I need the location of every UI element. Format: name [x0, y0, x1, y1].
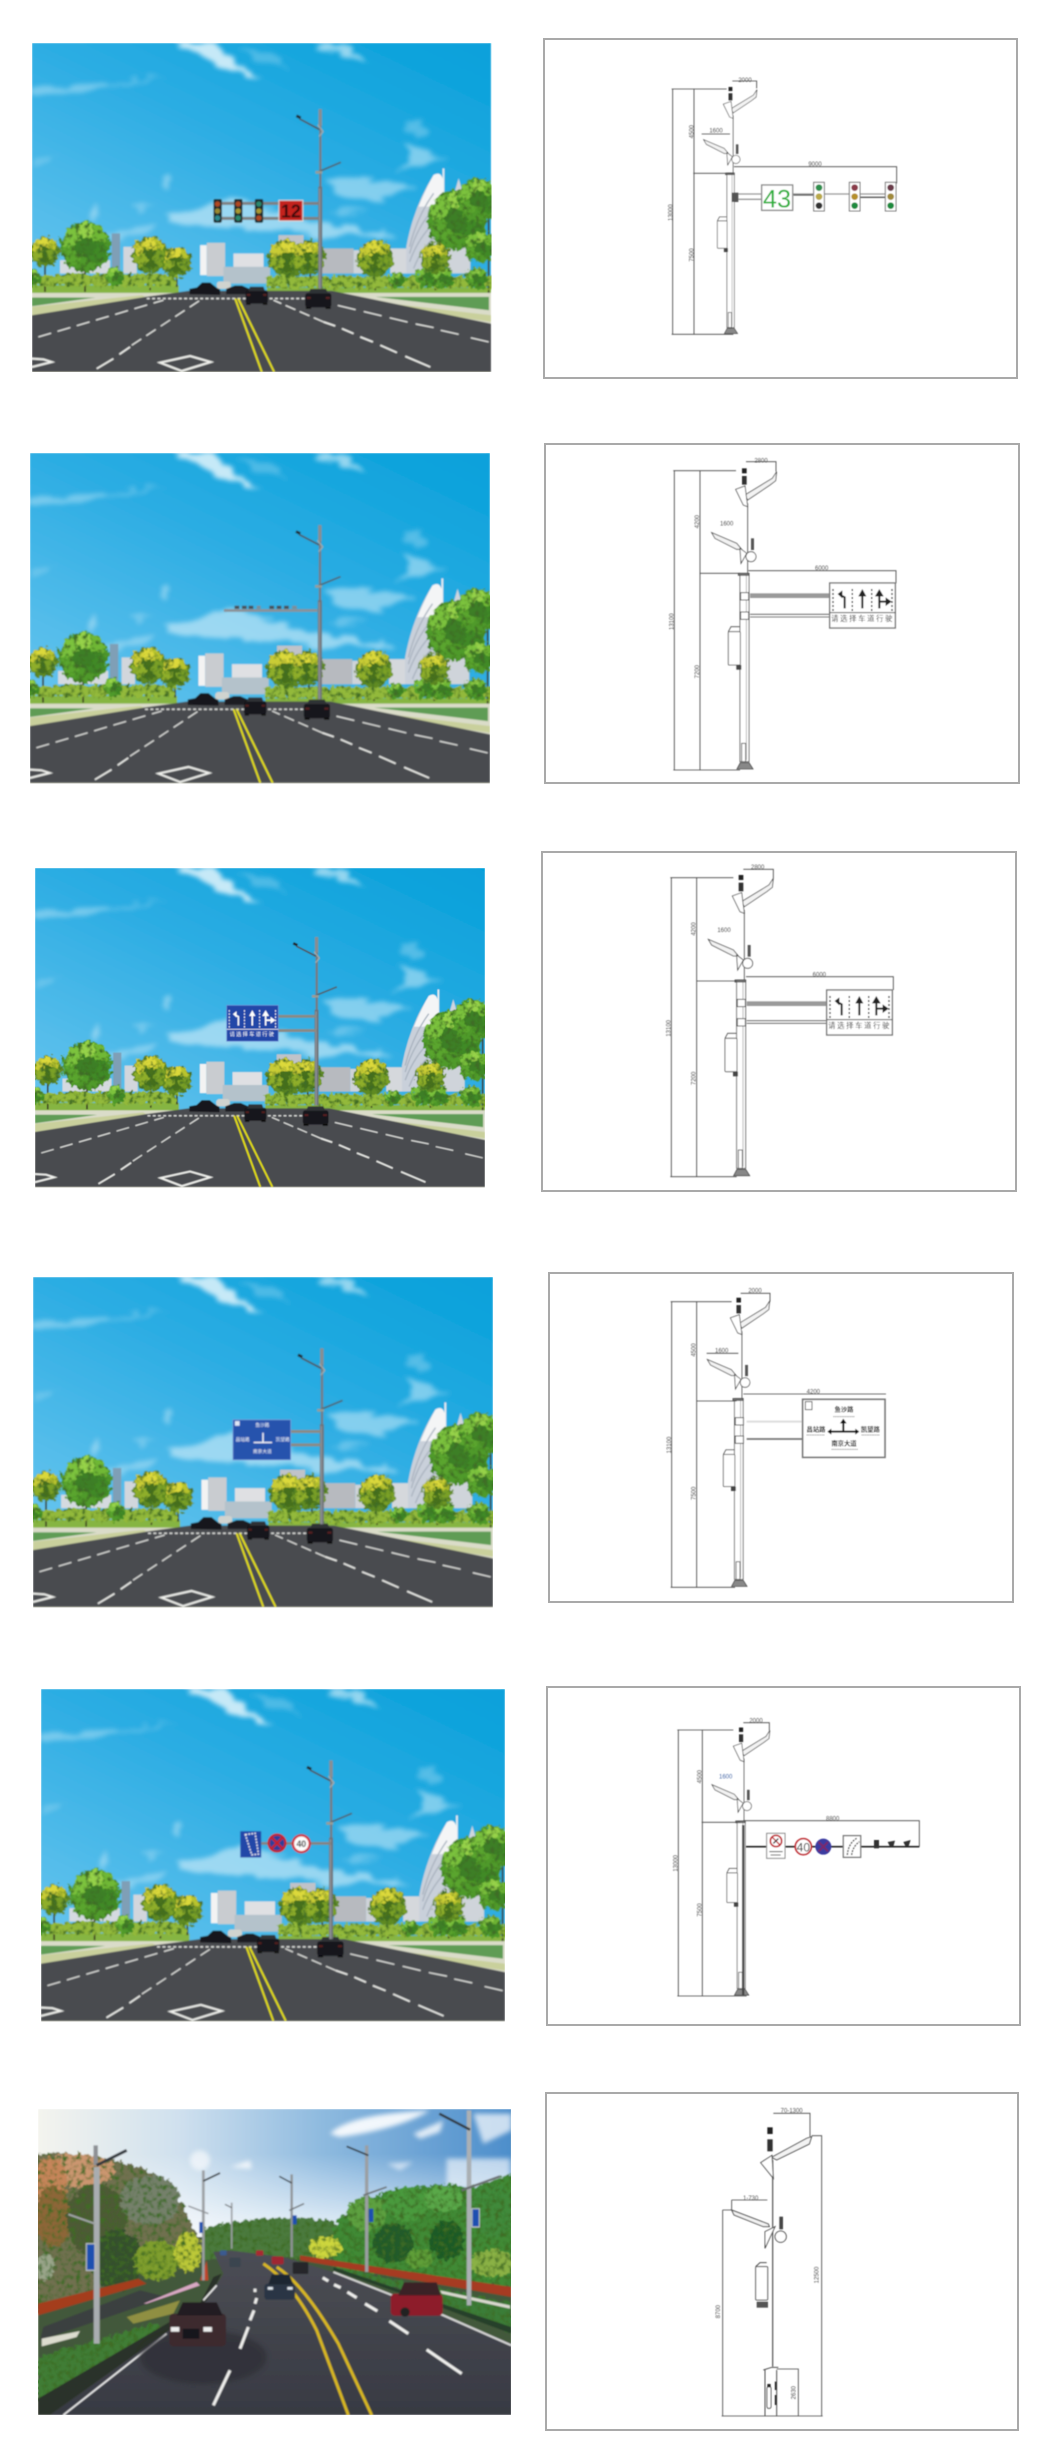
- trees and foliage: [33, 2153, 515, 2314]
- drawing panel 2: lane sign pole elevation: 4200: [695, 514, 701, 528]
- pole with arms and blue direction sign: 凯望路: [276, 1436, 290, 1443]
- arms and lane sign: [741, 583, 895, 628]
- drawing panel 1: signal pole elevation: 13000: [669, 204, 675, 221]
- arms and direction sign: [735, 1399, 885, 1457]
- drawing panel 6: lamp pole elevation: [546, 2093, 1018, 2430]
- drawing panel 1: signal pole elevation: 9000: [808, 162, 822, 168]
- drawing panel 1: signal pole elevation: 4500: [689, 124, 695, 138]
- dimension lines and values: [673, 462, 896, 770]
- pole with camera arm: [224, 525, 341, 699]
- road surface and markings: [50, 2250, 511, 2415]
- drawing panel 3: lane sign pole elevation: 1600: [717, 928, 731, 934]
- drawing panel 4: direction sign pole elevation: [549, 1273, 1013, 1602]
- drawing panel 4: direction sign pole elevation: 7500: [692, 1486, 698, 1500]
- arm with traffic signs and cameras: 40: [797, 1840, 810, 1854]
- drawing panel 6: lamp pole elevation: 8700: [716, 2304, 722, 2318]
- drawing panel 3: lane sign pole elevation: 7200: [692, 1071, 698, 1085]
- lamp pole outline: [732, 2127, 812, 2416]
- arms and lane sign: 请选择车道行驶: [831, 614, 894, 623]
- pole with arm and traffic signs: 40: [296, 1839, 306, 1849]
- drawing panel 2: lane sign pole elevation: 6000: [815, 566, 829, 572]
- drawing panel 5: round sign pole elevation: 13000: [674, 1854, 680, 1872]
- drawing panel 3: lane sign pole elevation: 13100: [666, 1019, 672, 1037]
- arms and direction sign: 昌站路: [807, 1424, 826, 1433]
- drawing panel 5: round sign pole elevation: 8800: [826, 1816, 840, 1822]
- arms and lane sign: [737, 990, 892, 1035]
- photo 4: blue direction sign street scene: [27, 1277, 502, 1608]
- arm with traffic signs and cameras: [746, 1833, 919, 1858]
- drawing panel 3: lane sign pole elevation: 4200: [692, 922, 698, 936]
- pole diagram: [712, 468, 777, 769]
- pole diagram: [707, 1298, 770, 1586]
- signal arm with countdown and heads: 43: [763, 186, 791, 214]
- ground base: [38, 2237, 511, 2415]
- arms and direction sign: 鱼沙路: [835, 1404, 854, 1413]
- drawing panel 4: direction sign pole elevation: 13100: [667, 1436, 673, 1453]
- drawing panel 3: lane sign pole elevation: 6000: [813, 972, 827, 978]
- pole with arms and blue direction sign: 昌站路: [236, 1436, 250, 1443]
- drawing panel 2: lane sign pole elevation: 13100: [669, 613, 675, 630]
- photo 2: camera gantry street scene: [24, 453, 499, 784]
- drawing panel 4: direction sign pole elevation: 1600: [715, 1348, 729, 1354]
- arms and direction sign: 南京大道: [831, 1438, 857, 1447]
- drawing panel 1: signal pole elevation: [544, 39, 1017, 378]
- signal arm with countdown and heads: [732, 182, 896, 214]
- pole with arms and blue lane sign: 请选择车道行驶: [230, 1030, 275, 1038]
- drawing panel 2: lane sign pole elevation: [545, 444, 1019, 783]
- drawing panel 3: lane sign pole elevation: 2800: [751, 865, 765, 871]
- drawing panel 2: lane sign pole elevation: 2800: [754, 459, 768, 465]
- drawing panel 1: signal pole elevation: 2000: [738, 78, 752, 84]
- drawing panel 1: signal pole elevation: 1600: [709, 129, 723, 135]
- photo 3: blue lane sign street scene: [29, 868, 494, 1188]
- drawing panel 1: signal pole elevation: 7500: [689, 248, 695, 262]
- drawing panel 2: lane sign pole elevation: 7200: [695, 664, 701, 678]
- drawing panel 2: lane sign pole elevation: 1600: [720, 521, 734, 527]
- traffic signal pole with heads and countdown display: [213, 109, 341, 288]
- drawing panel 6: lamp pole elevation: 2630: [791, 2385, 797, 2399]
- drawing panel 6: lamp pole elevation: 12500: [815, 2266, 821, 2283]
- drawing panel 5: round sign pole elevation: 7500: [697, 1903, 703, 1917]
- drawing panel 6: lamp pole elevation: 1-730: [743, 2196, 759, 2202]
- smart poles: [68, 2110, 500, 2344]
- pole with arms and blue direction sign: [233, 1348, 343, 1524]
- dimension lines and values: [722, 2113, 823, 2416]
- arms and direction sign: 凯望路: [861, 1424, 880, 1433]
- sky and clouds: [38, 2109, 511, 2276]
- ground and planting: [38, 2255, 511, 2415]
- pole with arms and blue lane sign: [227, 937, 337, 1105]
- pole diagram: [712, 1728, 770, 1995]
- pole with arms and blue direction sign: 南京大道: [253, 1448, 272, 1455]
- pole diagram: [704, 87, 757, 334]
- arms and lane sign: 请选择车道行驶: [828, 1021, 891, 1030]
- drawing panel 5: round sign pole elevation: [547, 1687, 1020, 2025]
- dimension lines and values: [672, 81, 897, 334]
- drawing panel 4: direction sign pole elevation: 4200: [807, 1389, 821, 1395]
- photo 5: round traffic signs street scene: [35, 1689, 514, 2022]
- dimension lines and values: [677, 1723, 919, 1996]
- drawing panel 3: lane sign pole elevation: [542, 852, 1016, 1191]
- drawing panel 4: direction sign pole elevation: 2000: [748, 1289, 762, 1295]
- drawing panel 5: round sign pole elevation: 1600: [719, 1774, 733, 1780]
- pole with arms and blue direction sign: 鱼沙路: [255, 1421, 270, 1428]
- drawing panel 4: direction sign pole elevation: 4500: [692, 1343, 698, 1357]
- dimension lines and values: [671, 1293, 886, 1587]
- traffic signal pole with heads and countdown display: 12: [281, 201, 301, 221]
- drawing panel 6: lamp pole elevation: 70-1300: [781, 2109, 803, 2115]
- photo 1: traffic signal street scene: [26, 43, 500, 373]
- pole diagram: [708, 875, 773, 1176]
- drawing panel 5: round sign pole elevation: 2000: [749, 1719, 763, 1725]
- pole with arm and traffic signs: [240, 1760, 352, 1939]
- drawing panel 5: round sign pole elevation: 4500: [697, 1769, 703, 1783]
- photo 6: boulevard perspective with smart poles: [33, 2109, 515, 2415]
- vehicles: [169, 2250, 443, 2346]
- dimension lines and values: [670, 869, 893, 1177]
